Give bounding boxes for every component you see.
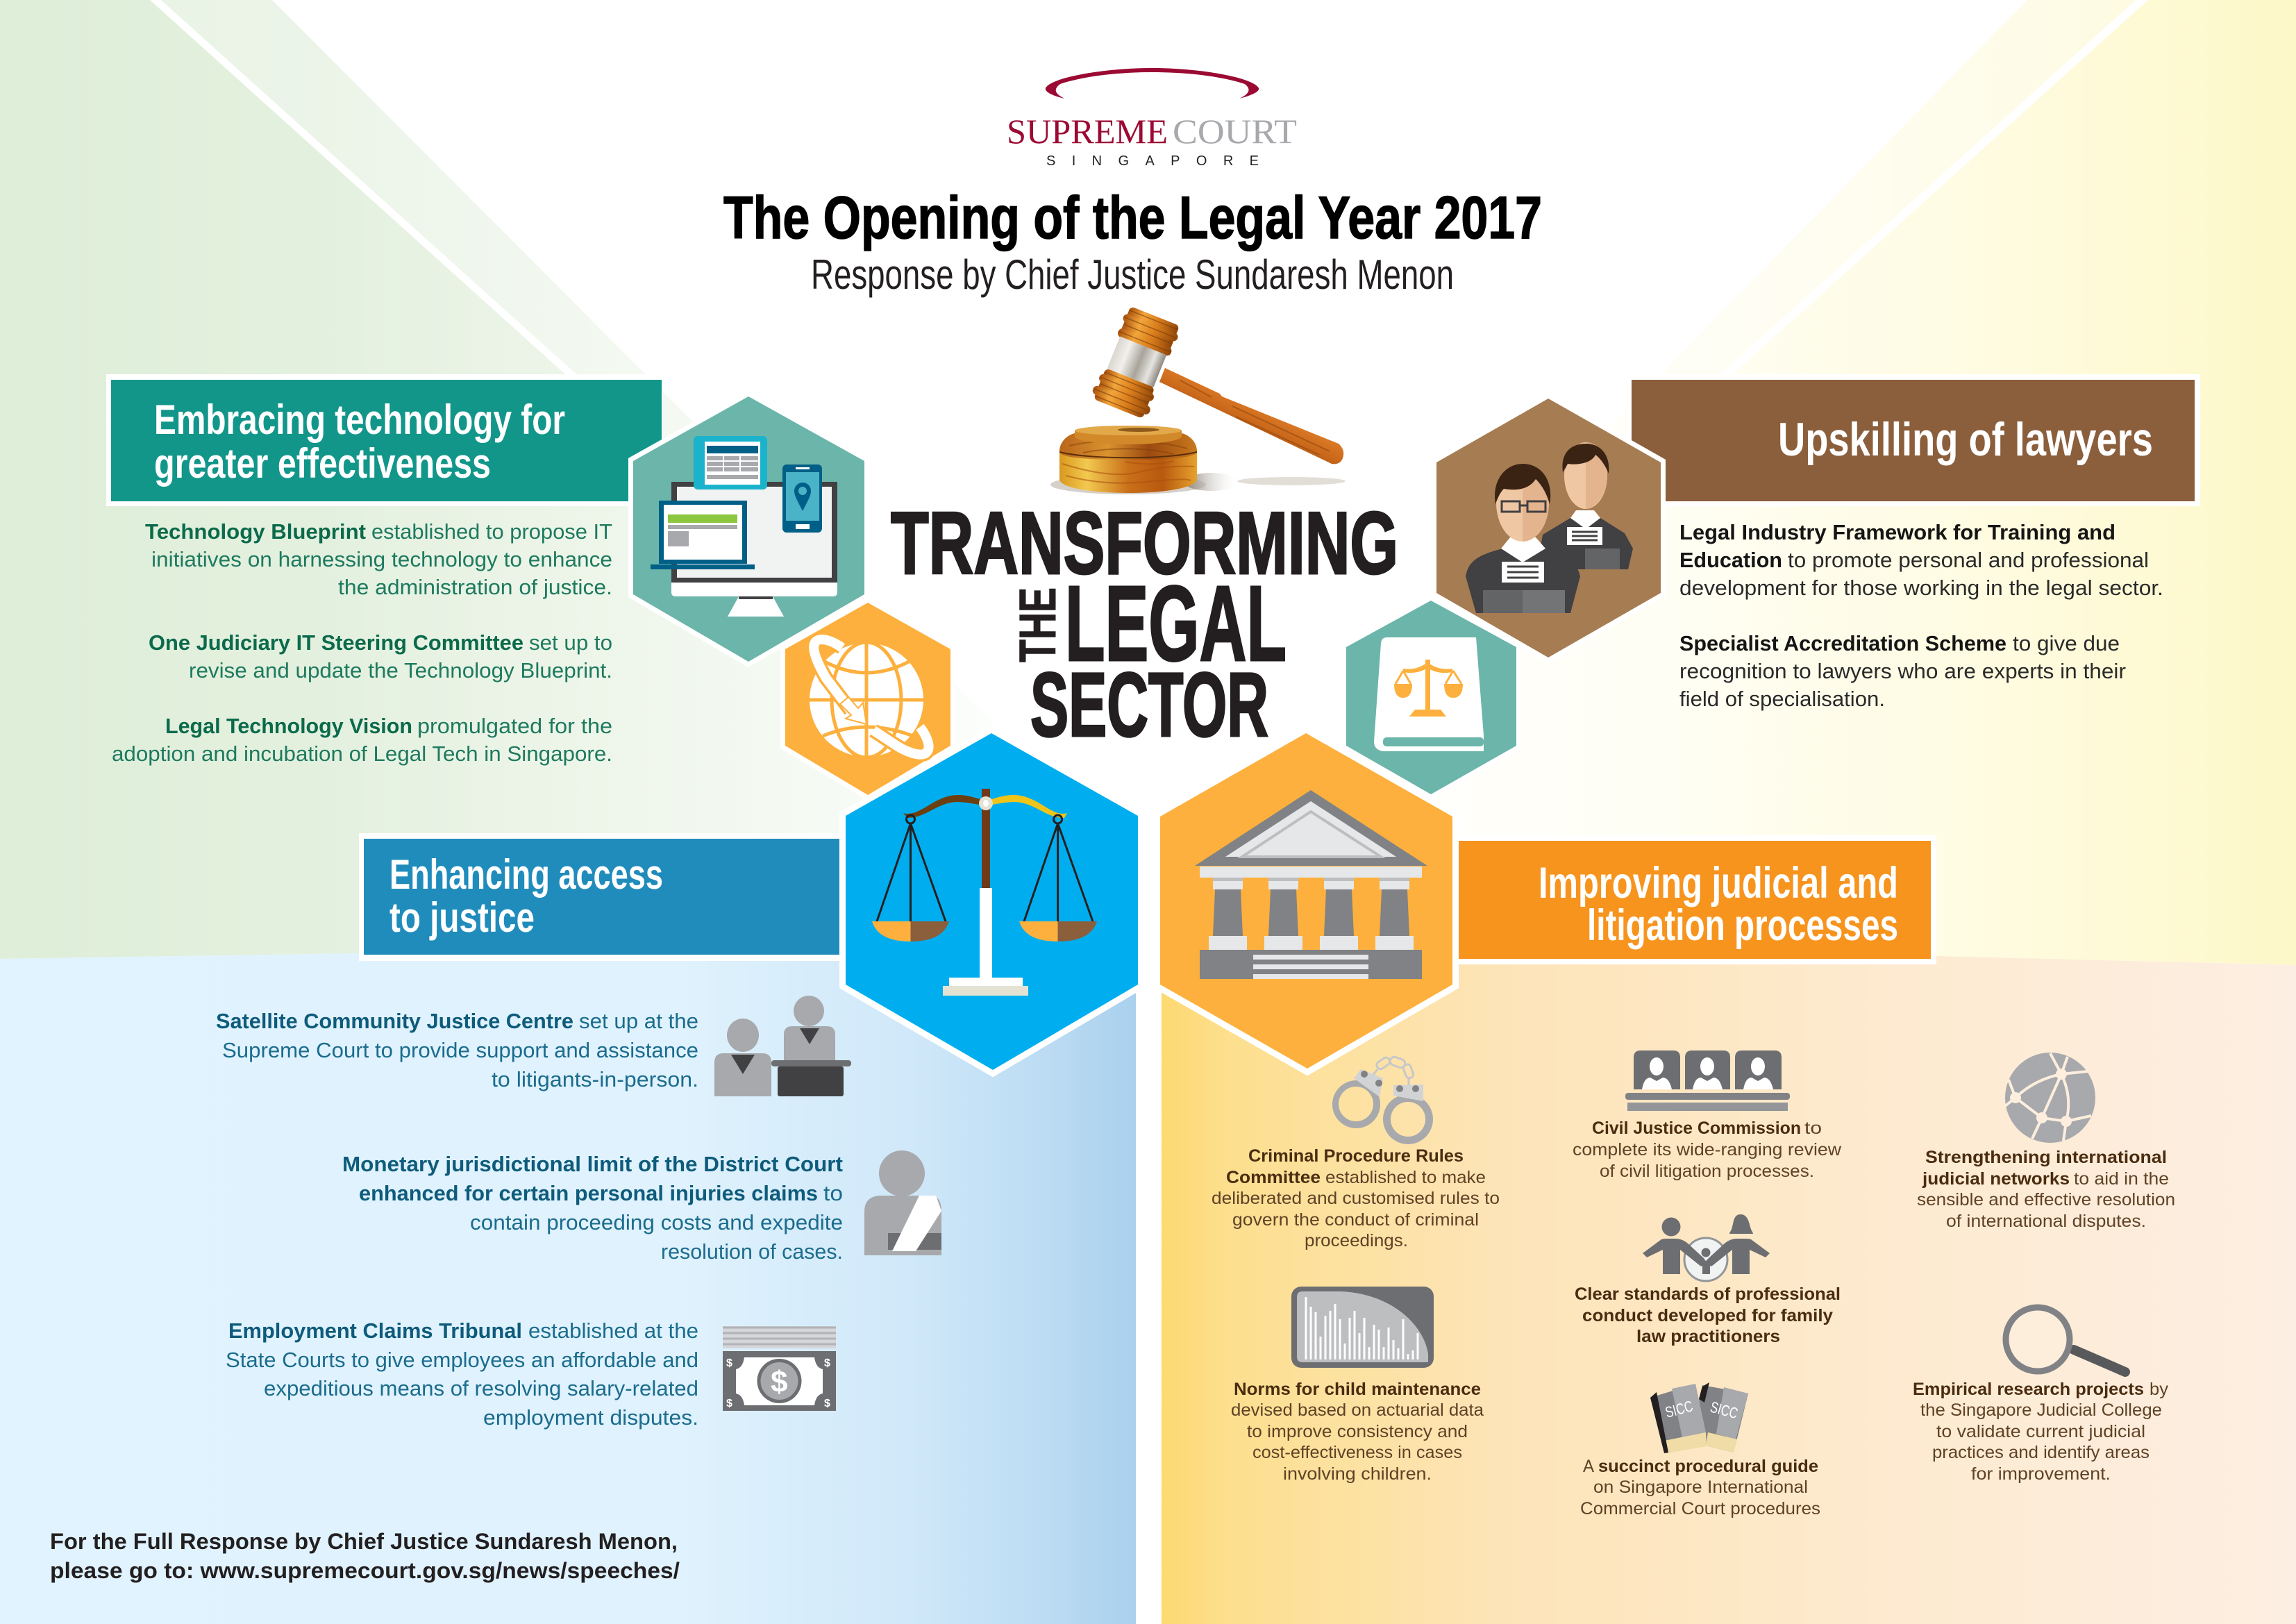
icon: SICC procedural guide books: SICC (1664, 1397, 1695, 1421)
text: satellite community justice centre: Satellite Community Justice Centre (216, 1009, 573, 1033)
heading box: upskilling (1627, 374, 2200, 506)
text block: upskilling initiatives: Legal Industry Framework for Training and (1679, 520, 2115, 544)
footer note: For the Full Response by Chief Justice Sundaresh Menon, (50, 1529, 678, 1554)
text block: upskilling initiatives: to promote personal and professional (1788, 548, 2149, 572)
heading: Transforming the Legal Sector: LEGAL (1065, 564, 1287, 683)
text: civil justice commission: complete its wide-ranging review (1573, 1140, 1842, 1160)
background: white diagonal stripe left (150, 0, 723, 506)
text: norms for child maintenance: devised based on actuarial data (1231, 1400, 1484, 1420)
text block: upskilling initiatives: to give due (2013, 631, 2120, 655)
text: monetary jurisdictional limit: contain proceeding costs and expedite (470, 1210, 843, 1234)
heading box: improving judicial and litigation processes: Improving judicial and (1539, 859, 1898, 907)
text: civil justice commission (1573, 1119, 1842, 1181)
heading: Transforming the Legal Sector (891, 494, 1398, 755)
text: strengthening international judicial networks: to aid in the (2074, 1169, 2169, 1189)
text: strengthening international judicial networks (1917, 1148, 2175, 1231)
icon: balance scale (872, 789, 1097, 996)
footer note (50, 1529, 680, 1583)
icon: courthouse building (1195, 790, 1427, 979)
title: The Opening of the Legal Year 2017 (723, 185, 1542, 251)
text: employment claims tribunal: established at the (528, 1319, 698, 1343)
heading: Transforming the Legal Sector: SECTOR (1030, 653, 1268, 755)
text: empirical research projects: for improvement. (1971, 1464, 2111, 1484)
text: employment claims tribunal: expeditious means of resolving salary-related (264, 1376, 698, 1400)
icon: dollar banknotes: $ (824, 1357, 830, 1369)
text: civil justice commission: to (1804, 1119, 1822, 1138)
logo: Supreme Court Singapore (1007, 68, 1297, 169)
icon: magnifying glass (2006, 1307, 2125, 1372)
text: criminal procedure rules committee (1212, 1146, 1500, 1250)
text: employment claims tribunal: employment disputes. (483, 1405, 698, 1430)
text block: upskilling initiatives: development for those working in the legal sector. (1679, 576, 2163, 600)
background: cream lower-right area (1162, 956, 2296, 1624)
hexagon: lawyers (1436, 399, 1661, 658)
icon: dollar banknotes: $ (726, 1357, 732, 1369)
icon: injured person with sling (864, 1150, 941, 1255)
logo: Supreme Court Singapore: SINGAPORE (1046, 153, 1259, 169)
text block: technology initiatives: One Judiciary IT Steering Committee (149, 630, 523, 655)
subtitle: Response by Chief Justice Sundaresh Menon (811, 251, 1454, 298)
icon: family (1643, 1214, 1770, 1281)
text: monetary jurisdictional limit: to (823, 1181, 843, 1205)
heading: Transforming the Legal Sector: THE (1009, 587, 1066, 662)
heading box: embracing technology: greater effectiveness (154, 440, 491, 487)
text: empirical research projects: by (2150, 1380, 2169, 1399)
text: criminal procedure rules committee: govern the conduct of criminal (1232, 1210, 1479, 1230)
text block: upskilling initiatives: Education (1679, 548, 1782, 572)
text: empirical research projects (1913, 1380, 2169, 1484)
background: green upper-left area (0, 0, 993, 959)
icon: globe with orbit arrow (810, 639, 929, 757)
hexagon: courthouse (1160, 733, 1452, 1069)
icon: gavel and sound block (1050, 305, 1346, 494)
heading box: enhancing access to justice: Enhancing access (389, 851, 663, 898)
text: strengthening international judicial networks: sensible and effective resolution (1917, 1190, 2175, 1209)
text block: upskilling initiatives: Specialist Accreditation Scheme (1679, 631, 2006, 655)
text: empirical research projects: Empirical research projects (1913, 1380, 2144, 1399)
text: succinct procedural guide (1580, 1457, 1820, 1518)
text block: technology initiatives: Legal Technology Vision (165, 714, 412, 738)
text block: upskilling initiatives: recognition to lawyers who are experts in their (1679, 659, 2126, 683)
text block: technology initiatives: set up to (529, 630, 612, 655)
heading box: enhancing access to justice (359, 833, 852, 961)
text: employment claims tribunal: Employment Claims Tribunal (228, 1319, 522, 1343)
icon: dollar banknotes (723, 1326, 836, 1411)
icon: dollar banknotes: $ (771, 1365, 787, 1399)
text block: technology initiatives: Technology Blueprint (145, 519, 366, 544)
text: clear standards of professional conduct: law practitioners (1636, 1327, 1780, 1346)
text: succinct procedural guide: on Singapore International (1593, 1477, 1808, 1497)
text: satellite community justice centre: to litigants-in-person. (492, 1067, 698, 1091)
heading box: improving judicial and litigation processes: litigation processes (1587, 901, 1898, 950)
hexagon: technology devices (633, 396, 864, 662)
text: norms for child maintenance: involving children. (1283, 1464, 1432, 1484)
background: lighter diagonal band right (1521, 0, 2136, 506)
text: criminal procedure rules committee: deliberated and customised rules to (1212, 1189, 1500, 1208)
icon: smartphone (782, 464, 822, 533)
background: white diagonal stripe right (1574, 0, 2148, 506)
icon: SICC procedural guide books: SICC (1709, 1398, 1740, 1422)
icon: desktop monitor (671, 482, 837, 617)
panel: judicial process items (1212, 1050, 2175, 1518)
text block: technology initiatives: initiatives on harnessing technology to enhance (151, 547, 612, 571)
heading: Transforming the Legal Sector: TRANSFORMING (891, 494, 1398, 592)
icon: network globe (2005, 1053, 2095, 1143)
icon: tablet (694, 436, 767, 489)
hexagon: scales of justice (846, 733, 1138, 1070)
text: monetary jurisdictional limit: Monetary jurisdictional limit of the District Court (342, 1152, 843, 1176)
logo: Supreme Court Singapore: SUPREME (1007, 112, 1168, 151)
text: civil justice commission: Civil Justice Commission (1592, 1119, 1801, 1138)
text: norms for child maintenance: Norms for child maintenance (1234, 1380, 1481, 1399)
text block: upskilling initiatives: field of specialisation. (1679, 687, 1885, 711)
icon: back lawyer (1536, 442, 1633, 569)
text: monetary jurisdictional limit: enhanced for certain personal injuries claims (359, 1181, 818, 1205)
text: clear standards of professional conduct (1575, 1284, 1841, 1346)
panel: upskilling of lawyers (1627, 374, 2200, 711)
icon: chart of maintenance data (1291, 1287, 1434, 1368)
icon: book with scales (1374, 637, 1484, 751)
text: satellite community justice centre (216, 1009, 698, 1091)
icon: three commission members at bench (1625, 1050, 1790, 1111)
heading box: improving judicial and litigation processes (1448, 835, 1936, 964)
text block: technology initiatives: promulgated for the (417, 714, 612, 738)
text: empirical research projects: practices and identify areas (1932, 1443, 2150, 1462)
text block: technology initiatives: established to propose IT (371, 519, 612, 544)
icon: dollar banknotes: $ (824, 1398, 830, 1409)
panel: enhancing access items (50, 996, 941, 1583)
text: norms for child maintenance: to improve consistency and (1247, 1422, 1468, 1441)
hexagon: law book (1346, 601, 1516, 794)
heading box: embracing technology (106, 374, 663, 506)
text block: technology initiatives: the administration of justice. (338, 575, 612, 599)
text: clear standards of professional conduct: Clear standards of professional (1575, 1284, 1841, 1304)
text block: technology initiatives: revise and update the Technology Blueprint. (189, 658, 612, 683)
text: monetary jurisdictional limit: resolution of cases. (661, 1239, 843, 1264)
panel: embracing technology (106, 374, 663, 766)
text: civil justice commission: of civil litigation processes. (1600, 1162, 1814, 1181)
text: monetary jurisdictional limit (342, 1152, 843, 1264)
text block: upskilling initiatives (1679, 520, 2163, 711)
icon: handcuffs (1332, 1056, 1433, 1144)
heading box: upskilling: Upskilling of lawyers (1778, 413, 2153, 466)
text block: technology initiatives: adoption and incubation of Legal Tech in Singapore. (112, 742, 612, 766)
text block: technology initiatives (112, 519, 612, 766)
text: norms for child maintenance (1231, 1380, 1484, 1484)
background: blue lower-left area (0, 953, 1136, 1624)
text: succinct procedural guide: A (1583, 1457, 1594, 1476)
icon: people at help desk (714, 996, 851, 1096)
text: criminal procedure rules committee: proceedings. (1305, 1231, 1408, 1250)
text: criminal procedure rules committee: established to make (1325, 1168, 1486, 1187)
text: criminal procedure rules committee: Committee (1226, 1168, 1321, 1187)
text: employment claims tribunal: State Courts to give employees an affordable and (226, 1348, 698, 1372)
text: succinct procedural guide: succinct procedural guide (1598, 1457, 1818, 1476)
footer note: please go to: www.supremecourt.gov.sg/news/speeches/ (50, 1558, 680, 1583)
text: succinct procedural guide: Commercial Court procedures (1580, 1499, 1820, 1518)
icon: SICC procedural guide books (1650, 1382, 1748, 1453)
text: criminal procedure rules committee: Criminal Procedure Rules (1248, 1146, 1464, 1166)
icon: laptop (651, 501, 755, 569)
text: empirical research projects: to validate current judicial (1936, 1422, 2145, 1441)
hexagon: globe (785, 603, 950, 795)
heading box: enhancing access to justice: to justice (389, 894, 535, 941)
text: strengthening international judicial networks: Strengthening international (1925, 1148, 2167, 1167)
text: strengthening international judicial networks: of international disputes. (1946, 1212, 2146, 1231)
icon: front lawyer with glasses (1466, 464, 1580, 613)
text: clear standards of professional conduct: conduct developed for family (1582, 1306, 1833, 1325)
logo: Supreme Court Singapore: COURT (1173, 112, 1297, 151)
background: lighter diagonal band left (161, 0, 778, 506)
icon: dollar banknotes: $ (726, 1398, 732, 1409)
text: empirical research projects: the Singapore Judicial College (1920, 1400, 2162, 1420)
text: norms for child maintenance: cost-effectiveness in cases (1252, 1443, 1462, 1462)
heading box: embracing technology: Embracing technology for (154, 396, 565, 443)
text: satellite community justice centre: Supreme Court to provide support and assistance (222, 1038, 698, 1062)
text: strengthening international judicial networks: judicial networks (1922, 1169, 2070, 1189)
text: satellite community justice centre: set up at the (579, 1009, 698, 1033)
text: employment claims tribunal (226, 1319, 698, 1430)
background: yellow upper-right area (1319, 0, 2296, 965)
